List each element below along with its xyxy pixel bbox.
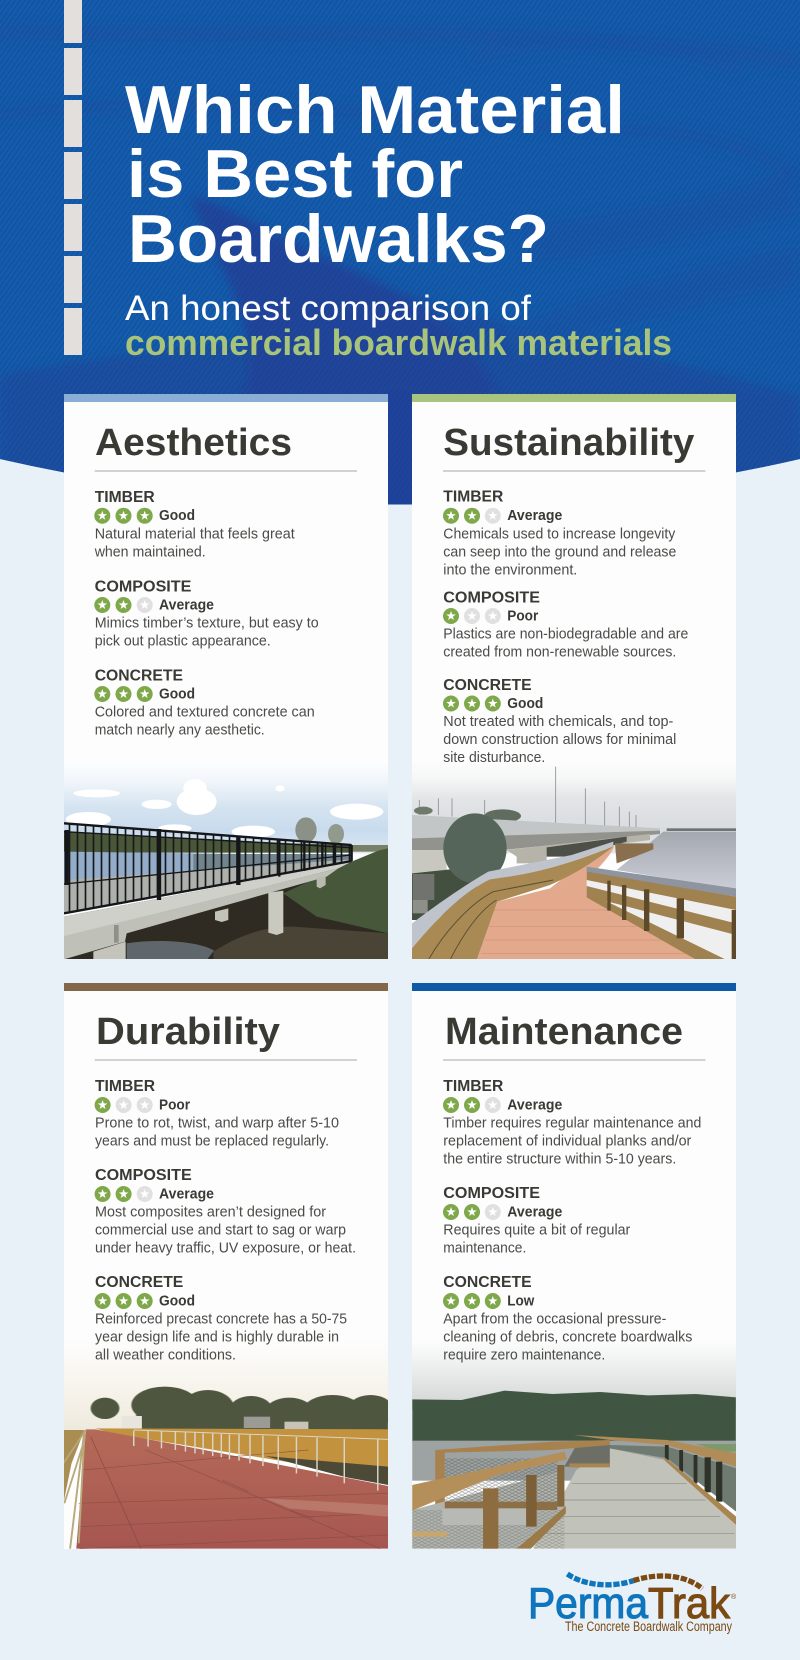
decorative dashed strip: boardwalk planks — [64, 0, 82, 355]
composite rating: pick out plastic appearance. — [95, 634, 271, 650]
concrete rating: match nearly any aesthetic. — [95, 723, 265, 739]
concrete rating: cleaning of debris, concrete boardwalks — [443, 1329, 692, 1345]
composite rating: COMPOSITE — [443, 589, 540, 606]
heading: Durability — [96, 1011, 280, 1053]
timber rating: TIMBER — [95, 489, 155, 506]
timber rating: TIMBER — [443, 1078, 504, 1095]
timber rating: Chemicals used to increase longevity — [443, 526, 676, 542]
composite rating: Requires quite a bit of regular — [443, 1222, 630, 1238]
heading: Maintenance — [445, 1011, 683, 1053]
concrete rating: all weather conditions. — [95, 1347, 236, 1363]
concrete rating: CONCRETE — [95, 668, 183, 685]
timber rating: Poor — [159, 1098, 190, 1114]
logo: PermaTrak: Trak — [648, 1579, 731, 1628]
composite rating: Average — [507, 1204, 562, 1220]
composite rating — [94, 578, 319, 650]
concrete rating: CONCRETE — [95, 1274, 184, 1291]
concrete rating — [443, 677, 676, 766]
concrete rating — [94, 668, 315, 739]
panel: aesthetics — [60, 394, 393, 960]
photo: red concrete boardwalk through marsh — [64, 1359, 388, 1549]
timber rating: the entire structure within 5-10 years. — [443, 1151, 676, 1167]
timber rating: into the environment. — [443, 562, 577, 578]
composite rating: commercial use and start to sag or warp — [95, 1222, 346, 1238]
composite rating — [95, 1167, 356, 1256]
concrete rating: Good — [159, 686, 195, 702]
concrete rating: year design life and is highly durable in — [95, 1329, 339, 1345]
concrete rating: Good — [507, 696, 543, 712]
timber rating: Good — [159, 508, 195, 524]
hero blue textured background — [0, 0, 800, 520]
concrete rating: Low — [507, 1294, 535, 1310]
photo: timber-railed boardwalk beside bridge — [410, 760, 743, 960]
concrete rating — [443, 1274, 692, 1363]
timber rating: Natural material that feels great — [95, 526, 295, 542]
subtitle — [125, 289, 672, 363]
subtitle: An honest comparison of — [125, 289, 531, 328]
timber rating: Average — [507, 508, 562, 524]
composite rating: COMPOSITE — [443, 1185, 540, 1202]
concrete rating: Reinforced precast concrete has a 50-75 — [95, 1311, 347, 1327]
composite rating: under heavy traffic, UV exposure, or heat. — [95, 1240, 356, 1256]
concrete rating: Good — [159, 1294, 195, 1310]
photo: light concrete boardwalk with timber rails — [409, 1340, 744, 1549]
composite rating: created from non-renewable sources. — [443, 644, 676, 660]
concrete rating: Not treated with chemicals, and top- — [443, 714, 673, 730]
composite rating: COMPOSITE — [95, 1167, 192, 1184]
composite rating: maintenance. — [443, 1240, 526, 1256]
concrete rating: Colored and textured concrete can — [95, 705, 315, 721]
timber rating: Average — [507, 1098, 562, 1114]
composite rating: Average — [159, 598, 214, 614]
composite rating: Poor — [507, 608, 539, 624]
heading: Sustainability — [443, 422, 694, 464]
concrete rating: down construction allows for minimal — [443, 732, 676, 748]
timber rating: when maintained. — [94, 544, 206, 560]
timber rating — [94, 489, 295, 560]
concrete rating — [95, 1274, 347, 1363]
logo: PermaTrak: Perma — [528, 1579, 648, 1628]
logo: PermaTrak — [528, 1574, 737, 1634]
timber rating: Timber requires regular maintenance and — [443, 1115, 701, 1131]
timber rating — [443, 489, 676, 578]
heading: Aesthetics — [95, 422, 292, 464]
timber rating: TIMBER — [95, 1078, 155, 1095]
composite rating: Average — [159, 1186, 214, 1202]
composite rating: COMPOSITE — [95, 578, 192, 596]
timber rating: replacement of individual planks and/or — [443, 1133, 691, 1149]
logo: PermaTrak: The Concrete Boardwalk Company — [565, 1619, 732, 1634]
composite rating: Most composites aren’t designed for — [95, 1204, 326, 1220]
timber rating: Prone to rot, twist, and warp after 5-10 — [95, 1115, 339, 1131]
title — [125, 72, 625, 277]
composite rating: Plastics are non-biodegradable and are — [443, 626, 688, 642]
title: Which Material — [125, 72, 625, 148]
timber rating: years and must be replaced regularly. — [95, 1133, 329, 1149]
panel: durability — [60, 983, 395, 1549]
concrete rating: require zero maintenance. — [443, 1347, 605, 1363]
composite rating: Mimics timber’s texture, but easy to — [95, 616, 319, 632]
panel: sustainability — [410, 394, 743, 960]
timber rating: can seep into the ground and release — [443, 544, 676, 560]
composite rating — [443, 589, 688, 660]
concrete rating: CONCRETE — [443, 677, 532, 694]
photo: concrete bridge with black railing — [64, 775, 388, 959]
timber rating: TIMBER — [443, 489, 504, 506]
concrete rating: CONCRETE — [443, 1274, 532, 1291]
panel: maintenance — [409, 983, 744, 1549]
timber rating — [443, 1078, 701, 1167]
logo: PermaTrak: ® — [731, 1593, 737, 1601]
concrete rating: site disturbance. — [443, 750, 545, 766]
concrete rating: Apart from the occasional pressure- — [443, 1311, 666, 1327]
subtitle: commercial boardwalk materials — [125, 322, 672, 363]
title: Boardwalks? — [128, 201, 549, 277]
composite rating — [443, 1185, 630, 1256]
title: is Best for — [127, 136, 463, 212]
timber rating — [95, 1078, 339, 1149]
